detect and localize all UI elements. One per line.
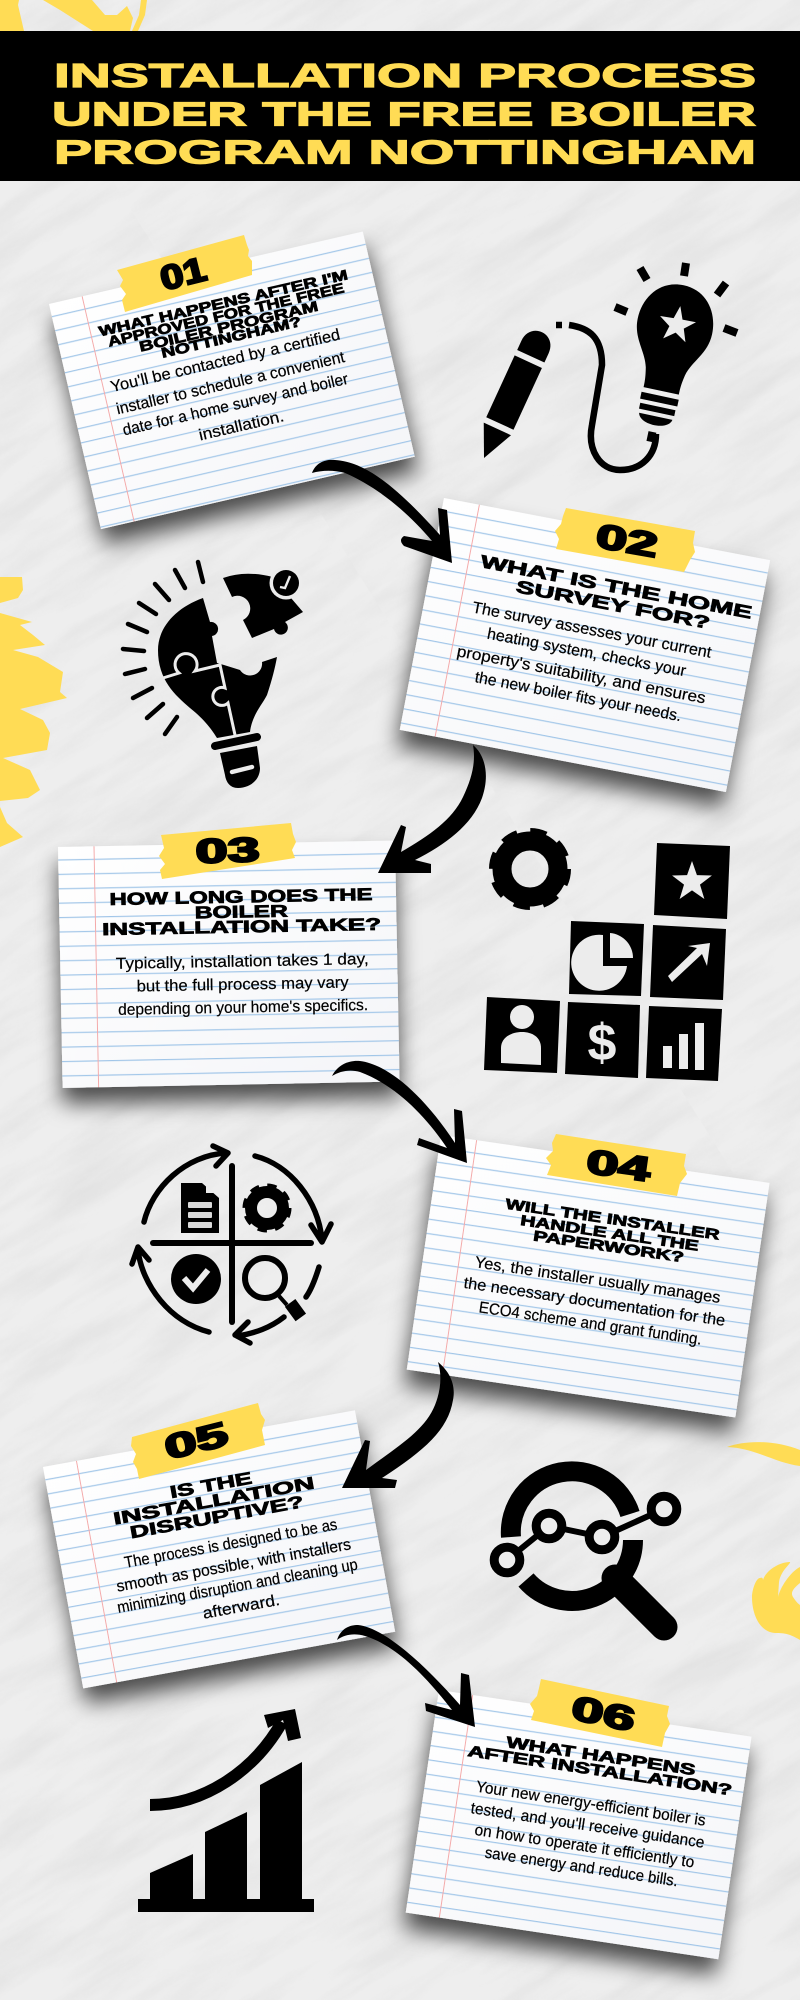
tape 06 xyxy=(530,1679,670,1747)
note 06 text xyxy=(452,1729,735,1896)
number 06: 06 xyxy=(568,1689,639,1739)
body 04: ECO4 scheme and grant funding. xyxy=(478,1299,703,1349)
panel: note 04 xyxy=(407,1134,770,1417)
title text xyxy=(52,58,756,172)
body 01: You'll be contacted by a certified xyxy=(109,327,342,396)
puzzle detached piece xyxy=(223,574,303,638)
paper 02 xyxy=(400,498,770,792)
cycle gear xyxy=(246,1186,288,1230)
decorative yellow brush: right blob xyxy=(752,1562,800,1640)
icon: cable xyxy=(556,325,656,470)
heading 03: BOILER xyxy=(195,902,288,922)
heading 05: IS THE xyxy=(168,1468,254,1502)
number 05: 05 xyxy=(161,1415,232,1468)
puzzle bulb base xyxy=(215,737,260,788)
chart line xyxy=(507,1509,664,1560)
heading 06: AFTER INSTALLATION? xyxy=(466,1743,733,1799)
panel: note 05 xyxy=(43,1403,395,1688)
puzzle seams xyxy=(163,654,235,735)
heading 01: BOILER PROGRAM xyxy=(138,298,320,355)
title text: PROGRAM NOTTINGHAM xyxy=(54,134,756,172)
body 02 xyxy=(451,598,716,729)
chart rising arrow xyxy=(150,1709,301,1805)
heading 01: WHAT HAPPENS AFTER I'M xyxy=(97,266,349,339)
arrow: note 4 to note 5 xyxy=(342,1362,454,1488)
icon: light bulb with star xyxy=(613,263,737,450)
heading 03: HOW LONG DOES THE xyxy=(109,885,373,909)
body 05: afterward. xyxy=(201,1592,281,1623)
number 03: 03 xyxy=(195,831,260,871)
body 04: Yes, the installer usually manages xyxy=(474,1254,722,1307)
chart bars xyxy=(150,1762,302,1900)
panel: note 02 xyxy=(400,498,770,792)
heading 04: WILL THE INSTALLER xyxy=(504,1197,721,1244)
number 02: 02 xyxy=(593,517,661,565)
number 04: 04 xyxy=(584,1143,653,1189)
body 06: tested, and you'll receive guidance xyxy=(470,1800,706,1852)
icon: magnifier with chart xyxy=(494,1471,677,1627)
heading 01: NOTTINGHAM? xyxy=(160,313,303,361)
body 06 xyxy=(463,1778,709,1893)
number 01: 01 xyxy=(156,250,210,298)
note 04 text xyxy=(459,1192,738,1352)
heading 05 xyxy=(109,1458,319,1545)
heading 02 xyxy=(476,551,754,640)
body 02: The survey assesses your current xyxy=(471,599,713,662)
body 03: depending on your home's specifics. xyxy=(118,997,368,1019)
tile: dollar xyxy=(565,1002,640,1078)
tape 05 xyxy=(131,1403,265,1479)
arrow: note 2 to note 3 xyxy=(378,745,486,873)
title banner xyxy=(0,31,800,181)
body 01: installer to schedule a convenient xyxy=(115,349,347,418)
heading 01 xyxy=(97,266,357,373)
body 03 xyxy=(116,951,370,1019)
heading 06: WHAT HAPPENS xyxy=(505,1734,697,1779)
icon: process cycle xyxy=(132,1146,331,1343)
note 03 text xyxy=(101,885,383,1019)
magnifier handle xyxy=(615,1578,664,1627)
heading 05: DISRUPTIVE? xyxy=(129,1492,305,1542)
paper 05 xyxy=(43,1410,395,1688)
paper 03 xyxy=(58,841,400,1088)
note 01 text xyxy=(96,266,377,461)
body 03: Typically, installation takes 1 day, xyxy=(116,951,369,973)
body 02: the new boiler fits your needs. xyxy=(473,669,683,725)
body 01 xyxy=(109,327,357,461)
arrow: note 1 to note 2 xyxy=(312,460,452,563)
chart baseline xyxy=(138,1899,314,1912)
icon: pencil xyxy=(470,326,556,464)
paper 06 xyxy=(406,1690,752,1959)
paper 01 xyxy=(49,232,415,529)
body 04: the necessary documentation for the xyxy=(463,1275,726,1330)
cycle document xyxy=(181,1183,219,1233)
magnifier ring top xyxy=(511,1471,630,1537)
panel: note 03 xyxy=(58,823,400,1088)
title text: INSTALLATION PROCESS xyxy=(54,58,756,95)
icon: puzzle bulb xyxy=(123,562,303,788)
paper 04 xyxy=(407,1135,770,1417)
body 02: property's suitability, and ensures xyxy=(455,643,707,707)
cycle cross xyxy=(153,1166,311,1322)
body 02: heating system, checks your xyxy=(486,626,688,680)
tile: bar chart xyxy=(646,1006,722,1081)
bulb rays xyxy=(615,263,737,333)
heading 02: SURVEY FOR? xyxy=(514,576,712,633)
heading 05: INSTALLATION xyxy=(112,1473,316,1529)
tile: star xyxy=(654,843,730,919)
heading 06 xyxy=(466,1729,735,1799)
body 04 xyxy=(459,1253,730,1352)
decorative yellow brush: right crescent xyxy=(727,1442,800,1466)
clock badge xyxy=(270,566,302,600)
heading 02: WHAT IS THE HOME xyxy=(479,551,754,623)
body 05: The process is designed to be as xyxy=(123,1516,339,1572)
body 06: Your new energy-efficient boiler is xyxy=(475,1779,707,1830)
heading 03: INSTALLATION TAKE? xyxy=(102,915,381,939)
body 01: date for a home survey and boiler xyxy=(121,371,351,439)
puzzle body xyxy=(158,598,277,738)
magnifier ring bottom xyxy=(526,1540,633,1601)
heading 04 xyxy=(501,1197,721,1271)
heading 04: PAPERWORK? xyxy=(532,1228,685,1266)
arrow: note 5 to note 6 xyxy=(337,1625,475,1727)
arrow: note 3 to note 4 xyxy=(332,1061,467,1163)
icon: gear xyxy=(493,832,567,906)
panel: note 06 xyxy=(406,1679,752,1959)
decorative yellow brush: left edge xyxy=(0,577,67,847)
note 05 text xyxy=(97,1453,363,1637)
tape 04 xyxy=(546,1134,687,1196)
body 05: smooth as possible, with installers xyxy=(115,1536,352,1596)
body 06: on how to operate it efficiently to xyxy=(473,1822,696,1872)
title text: UNDER THE FREE BOILER xyxy=(52,96,756,134)
panel: note 01 xyxy=(49,232,415,529)
tape 02 xyxy=(555,508,695,572)
body 01: installation. xyxy=(197,408,286,444)
tile: dollar: $ xyxy=(588,1014,617,1072)
body 05 xyxy=(108,1514,363,1637)
heading 04: HANDLE ALL THE xyxy=(519,1213,700,1255)
chart line gap xyxy=(507,1509,664,1560)
note 02 text xyxy=(451,550,754,735)
body 03: but the full process may vary xyxy=(137,974,349,996)
chart nodes xyxy=(494,1496,677,1573)
cycle magnifier xyxy=(245,1258,304,1317)
tape 01 xyxy=(117,235,252,312)
heading 01: APPROVED FOR THE FREE xyxy=(106,279,346,349)
body 05: minimizing disruption and cleaning up xyxy=(116,1556,359,1617)
icon: business tiles xyxy=(484,843,730,1081)
heading 03 xyxy=(101,885,381,939)
tile: person xyxy=(484,997,560,1073)
tile: growth arrow xyxy=(650,925,726,1000)
decorative yellow brush: top left xyxy=(0,0,147,31)
body 06: save energy and reduce bills. xyxy=(484,1845,679,1890)
cycle check xyxy=(171,1254,221,1304)
puzzle rays xyxy=(123,562,203,734)
cycle arrows xyxy=(132,1146,331,1343)
tile: pie chart xyxy=(569,921,644,996)
tape 03 xyxy=(159,823,296,879)
icon: rising bar chart xyxy=(138,1709,314,1912)
